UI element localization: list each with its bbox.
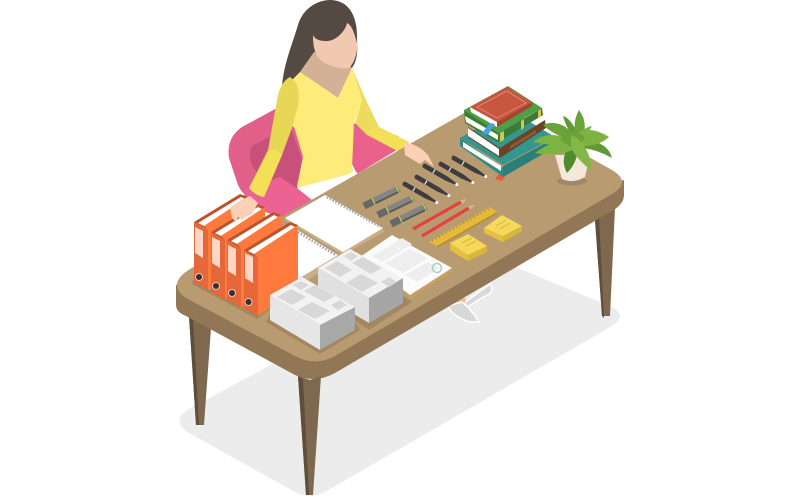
stack of books [460,86,555,181]
sticky notes: front [450,234,487,261]
chair right armrest [350,123,405,174]
right sleeve [352,68,409,154]
table leg: front [298,376,321,495]
ruler [429,207,497,248]
pot [555,155,590,181]
table leg: back right [595,208,615,318]
right hand [404,143,434,167]
red ribbon bookmark [495,168,509,181]
left lower sleeve [249,150,282,197]
pot shadow [557,176,587,186]
face [313,23,357,68]
teal book [460,110,555,177]
table top [177,100,622,362]
floor shadow [180,255,620,496]
red book [470,87,532,127]
pen 2 [414,174,451,198]
brown book [468,120,546,158]
left sleeve [249,77,299,197]
binder shadow [192,280,300,319]
office chair [229,108,405,218]
hair [282,0,357,88]
woman [249,0,409,200]
binder 4 [244,222,298,316]
right lower sleeve [367,128,409,154]
binder 3 [227,212,281,308]
feet and shoes [448,284,492,322]
paper stack: back [311,249,412,330]
pen 4 [438,161,475,185]
table leg: left [189,316,211,425]
pen 5 [451,155,488,179]
highlighter 1 [362,186,401,209]
chair back [229,108,305,202]
highlighter 2 [376,195,415,218]
chair seat [244,177,315,218]
potted plant [533,110,612,186]
binder 2 [211,204,265,300]
white trousers [297,172,358,200]
leaves [533,135,574,146]
chair inner shade [250,125,302,190]
lower notebook [298,230,340,284]
neck [300,52,352,98]
pen 3 [422,163,459,187]
pencil 1 [413,199,467,229]
sticky notes: back [484,215,522,242]
pen 1 [402,181,439,205]
green book [464,86,543,142]
paper stack: front [266,277,360,354]
binder 1 [194,194,248,290]
pencil 2 [422,205,475,236]
upper notebook [285,195,385,255]
left hand [230,196,258,222]
table side [176,180,624,379]
highlighter 3 [389,204,428,227]
clipboard document [360,235,453,298]
shirt [287,68,362,191]
blue ribbon bookmark [482,123,495,135]
